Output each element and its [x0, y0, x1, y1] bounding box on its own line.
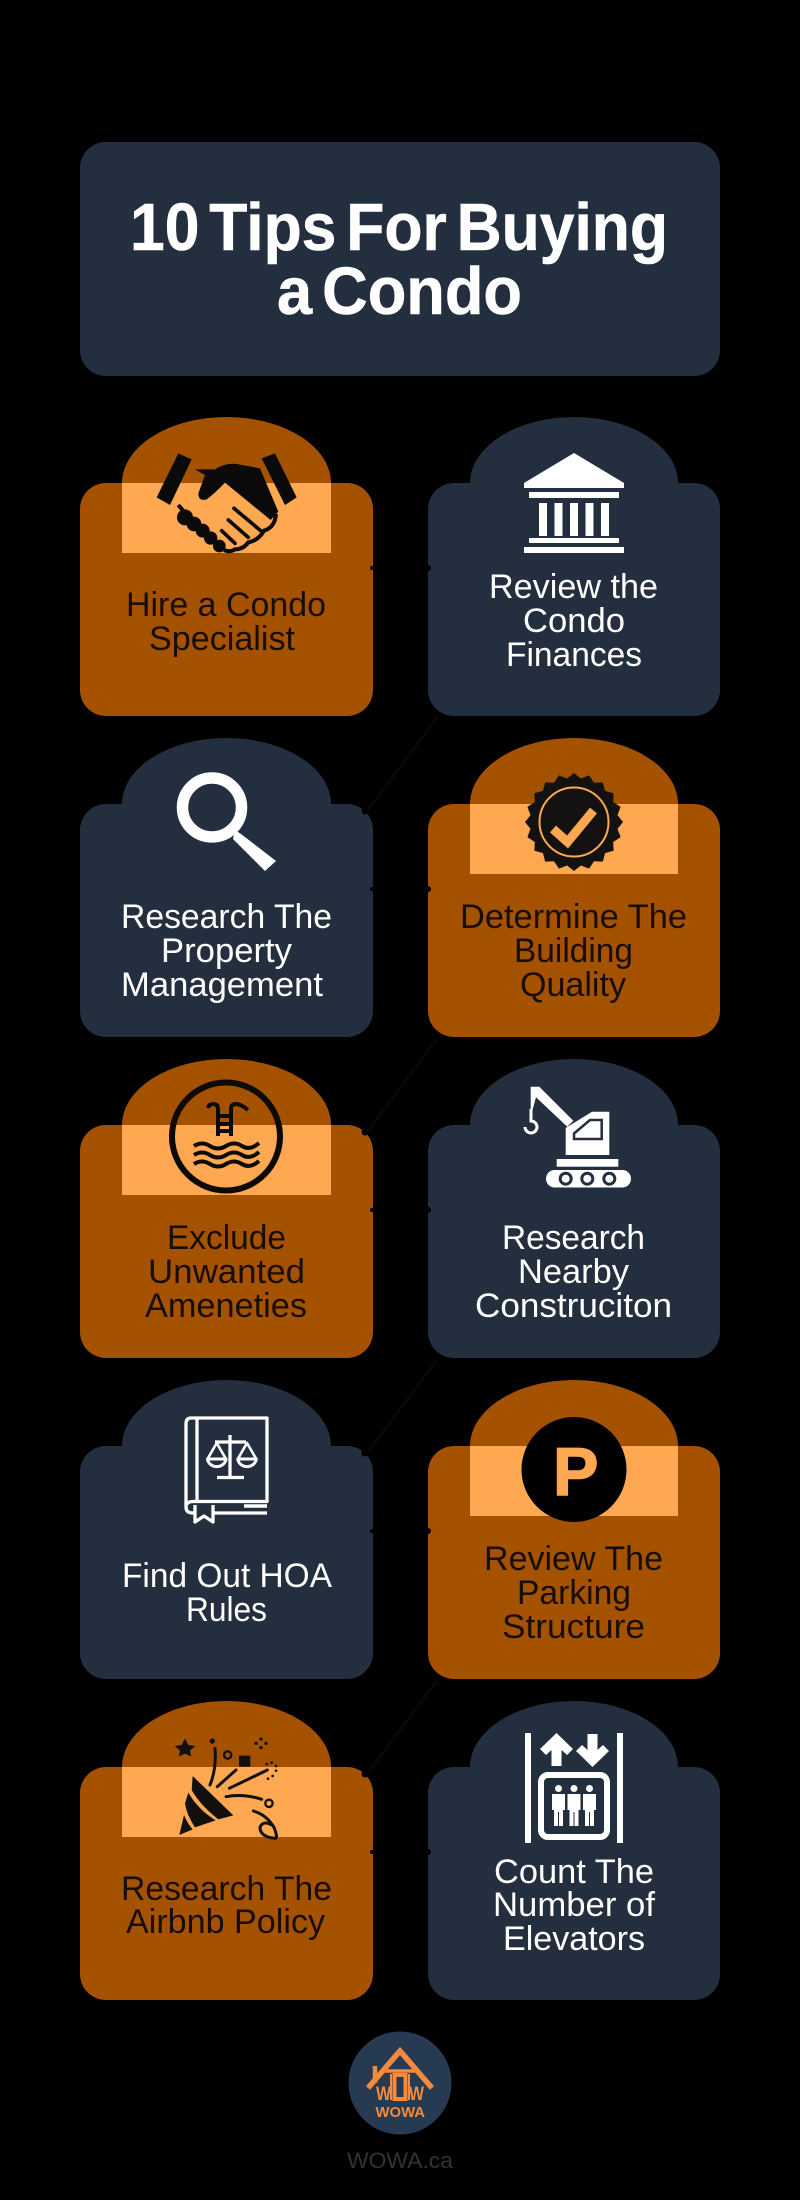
- card 7: Find Out HOA Rules: [80, 1380, 373, 1679]
- label: Review the: [489, 568, 658, 606]
- logo: WOWA house badge: [348, 2032, 452, 2134]
- logo: WOWA house badge: W: [376, 2084, 391, 2105]
- connectors between cards: [362, 565, 436, 1855]
- label: Structure: [502, 1608, 645, 1646]
- label: Unwanted: [148, 1253, 305, 1291]
- icon: swimming pool: [172, 1082, 280, 1190]
- label: Review The: [484, 1540, 663, 1578]
- label: Construciton: [475, 1287, 672, 1325]
- label: Building: [514, 932, 633, 970]
- label: Condo: [523, 602, 625, 640]
- card 3: Research The Property Management: [80, 738, 373, 1037]
- label: [475, 1219, 672, 1325]
- label: [126, 586, 326, 658]
- card 4: Determine The Building Quality: [428, 738, 720, 1037]
- label: Research: [502, 1219, 645, 1257]
- label: Finances: [506, 636, 642, 674]
- label: [460, 898, 687, 1004]
- label: Exclude: [167, 1219, 286, 1257]
- label: Count The: [494, 1853, 654, 1891]
- label: Quality: [520, 966, 626, 1004]
- label: Specialist: [149, 620, 296, 658]
- icon: parking sign: [522, 1417, 626, 1522]
- icon: quality badge: [525, 773, 623, 871]
- label: Rules: [186, 1591, 267, 1629]
- label: [145, 1219, 307, 1325]
- card 8: Review The Parking Structure: [428, 1380, 720, 1679]
- label: [121, 1870, 332, 1941]
- label: Parking: [517, 1574, 631, 1612]
- title panel: [80, 142, 720, 376]
- label: Airbnb Policy: [126, 1903, 325, 1941]
- label: Property: [161, 932, 292, 970]
- footer text: WOWA.ca: WOWA.ca: [347, 2148, 454, 2173]
- logo: WOWA house badge: W: [409, 2084, 424, 2105]
- icon: law book: [186, 1418, 267, 1522]
- label: [122, 1557, 332, 1629]
- icon: handshake: [157, 453, 297, 552]
- label: Find Out HOA: [122, 1557, 332, 1595]
- label: Determine The: [460, 898, 687, 936]
- label: Research The: [121, 898, 332, 936]
- title: 10 Tips For Buying: [130, 190, 668, 265]
- card 10: Count The Number of Elevators: [428, 1701, 720, 2000]
- card 9: Research The Airbnb Policy: [80, 1701, 373, 2000]
- label: Management: [121, 966, 324, 1004]
- label: Nearby: [518, 1253, 629, 1291]
- icon: party popper: [175, 1737, 277, 1838]
- label: Elevators: [503, 1920, 645, 1958]
- icon: bank building: [524, 453, 624, 553]
- label: Ameneties: [145, 1287, 307, 1325]
- title: a Condo: [277, 254, 522, 329]
- label: [121, 898, 332, 1004]
- label: Research The: [121, 1870, 332, 1908]
- label: Number of: [493, 1886, 656, 1924]
- card 1: Hire a Condo Specialist: [80, 417, 373, 716]
- card 6: Research Nearby Construciton: [428, 1059, 720, 1358]
- icon: construction crane: [525, 1087, 631, 1188]
- icon: elevator: [525, 1733, 623, 1843]
- label: [484, 1540, 663, 1646]
- card 2: Review the Condo Finances: [428, 417, 720, 716]
- card 5: Exclude Unwanted Ameneties: [80, 1059, 373, 1358]
- icon: parking sign: P: [553, 1434, 598, 1510]
- logo: WOWA house badge: WOWA: [376, 2105, 426, 2121]
- label: [489, 568, 658, 674]
- label: Hire a Condo: [126, 586, 326, 624]
- label: [493, 1853, 656, 1958]
- icon: magnifying glass: [182, 778, 276, 871]
